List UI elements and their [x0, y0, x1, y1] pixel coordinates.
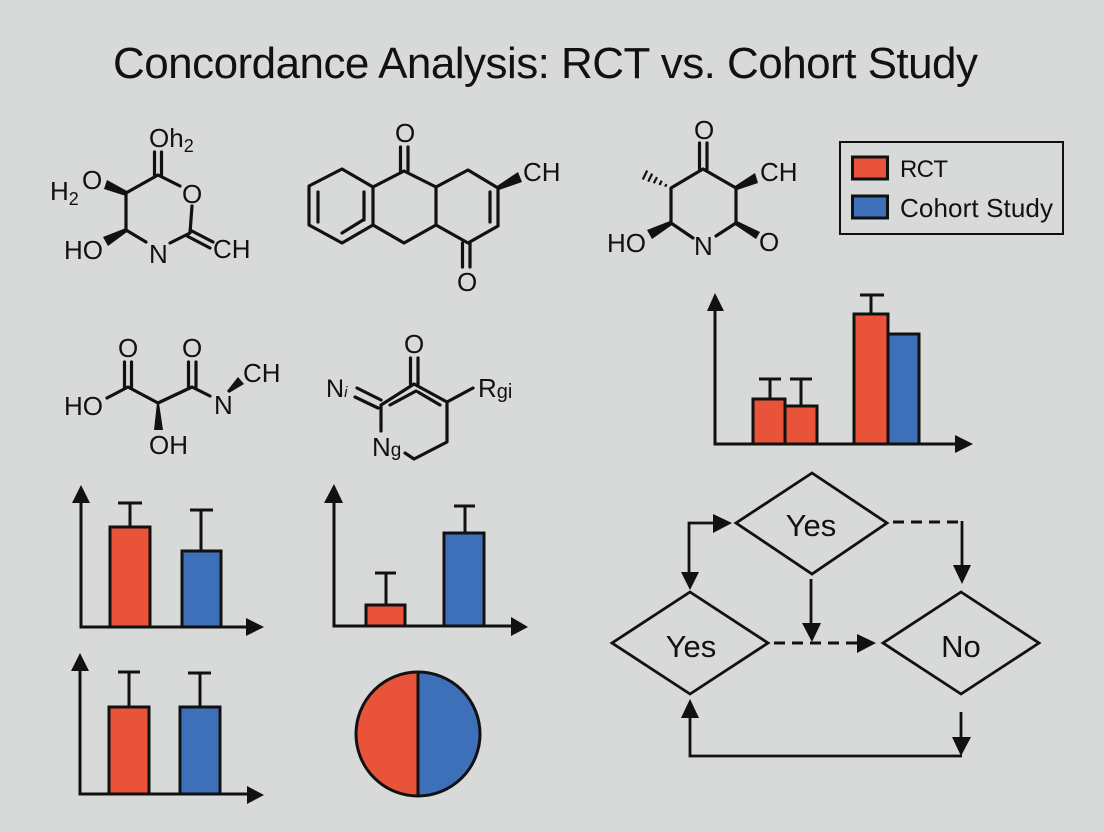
molecule: top centre tricyclic: O: [395, 118, 415, 148]
molecule: top left ring: 2: [69, 189, 79, 209]
molecule: middle left chain: [64, 333, 281, 460]
molecule: top centre tricyclic: CH: [523, 157, 561, 187]
axes: [715, 309, 957, 444]
arrow: dashed top to No: [893, 521, 971, 584]
molecule: top left ring: O: [82, 165, 102, 195]
pie chart: [356, 672, 480, 796]
decision: right No: [883, 592, 1039, 694]
error bars: [759, 295, 884, 406]
molecule: top centre tricyclic: [309, 118, 561, 297]
decision: top Yes: Yes: [786, 508, 836, 543]
title: Concordance Analysis: RCT vs. Cohort Study: [113, 39, 978, 88]
arrow: left double-headed connector: [681, 514, 732, 590]
flowchart: [612, 473, 1039, 756]
molecule: middle left chain: HO: [64, 391, 103, 421]
legend swatch: Cohort Study: [852, 196, 888, 218]
molecule: top right ring: CH: [760, 157, 798, 187]
arrow: return loop: [681, 699, 971, 756]
molecule: middle centre ring: [326, 329, 512, 462]
molecule: top right ring: O: [759, 227, 779, 257]
molecule: middle left chain: O: [182, 333, 202, 363]
molecule: middle centre ring: Ni: [326, 375, 348, 403]
bar chart: lower left: [72, 485, 264, 636]
molecule: top left ring: 2: [184, 136, 194, 156]
molecule: top right ring: HO: [607, 228, 646, 258]
legend swatch: RCT: [852, 157, 888, 179]
legend label: Cohort Study: Cohort Study: [900, 193, 1053, 223]
bar chart: upper right: [707, 293, 973, 453]
decision: top Yes: [736, 473, 887, 574]
molecule: top left ring: [50, 123, 251, 269]
molecule: middle left chain: O: [118, 333, 138, 363]
legend: [840, 142, 1063, 234]
arrow: centre down: [802, 579, 821, 642]
molecule: top centre tricyclic: O: [457, 267, 477, 297]
molecule: top right ring: O: [694, 115, 714, 145]
bar chart: lower centre: [324, 484, 528, 636]
molecule: middle centre ring: gi: [497, 381, 512, 403]
molecule: top left ring: Oh: [149, 123, 184, 153]
molecule: middle left chain: N: [214, 390, 233, 420]
molecule: top right ring: [607, 115, 798, 261]
arrow: dashed Yes to No: [774, 634, 876, 653]
molecule: top left ring: HO: [64, 235, 103, 265]
decision: right No: No: [941, 629, 981, 664]
molecule: top right ring: N: [694, 231, 713, 261]
molecule: middle left chain: CH: [243, 358, 281, 388]
molecule: top left ring: O: [182, 179, 202, 209]
bars: [753, 399, 785, 444]
bar chart: bottom left: [71, 653, 264, 804]
decision: left Yes: Yes: [666, 629, 716, 664]
molecule: middle left chain: OH: [149, 430, 188, 460]
molecule: middle centre ring: Ng: [372, 432, 401, 462]
molecule: top left ring: N: [149, 239, 168, 269]
molecule: top left ring: H: [50, 176, 69, 206]
molecule: middle centre ring: R: [478, 373, 497, 403]
decision: left Yes: [612, 592, 768, 694]
molecule: middle centre ring: O: [404, 329, 424, 359]
legend label: RCT: RCT: [900, 156, 948, 183]
molecule: top left ring: CH: [213, 234, 251, 264]
